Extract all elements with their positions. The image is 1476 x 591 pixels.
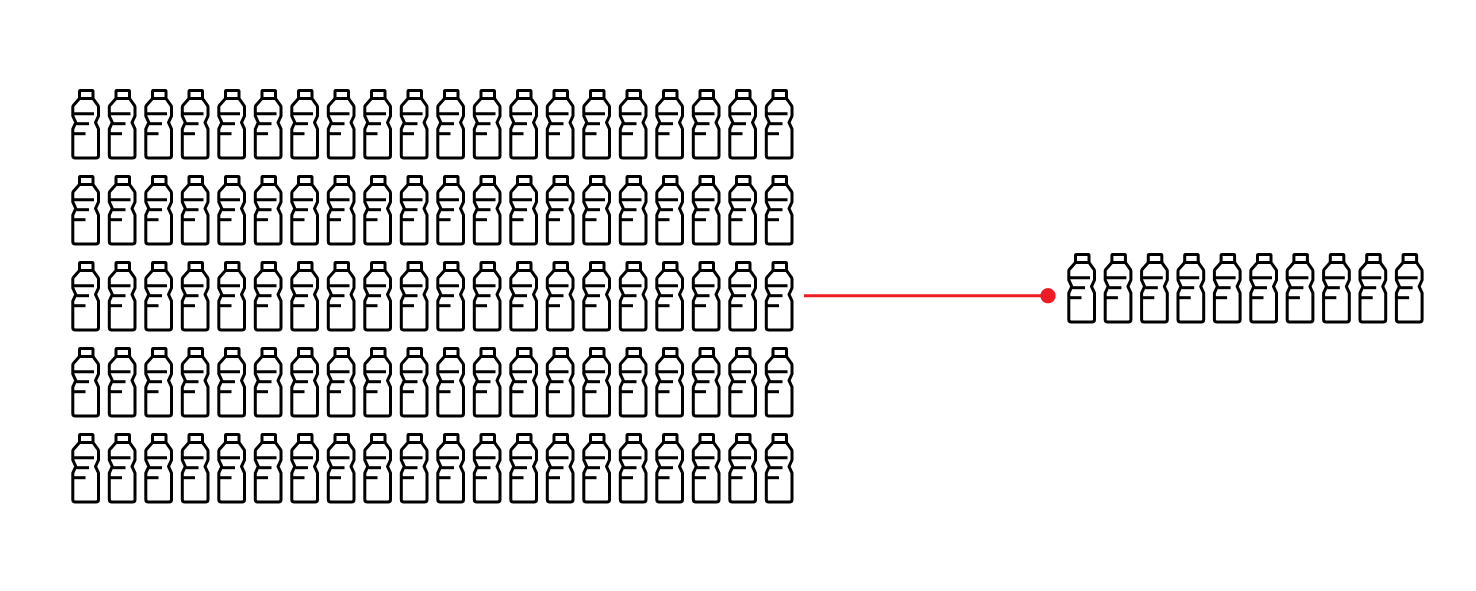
bottle grid: 100 bottles (73, 90, 792, 502)
bottle row 2 (73, 176, 792, 244)
bottle row 5 (73, 434, 792, 502)
bottle row: 10 bottles on the right (1069, 254, 1422, 322)
bottle row 1 (73, 90, 792, 158)
bottle row 3 (73, 262, 792, 330)
bottle row 4 (73, 348, 792, 416)
connector arrow: red line with dot (804, 288, 1056, 303)
